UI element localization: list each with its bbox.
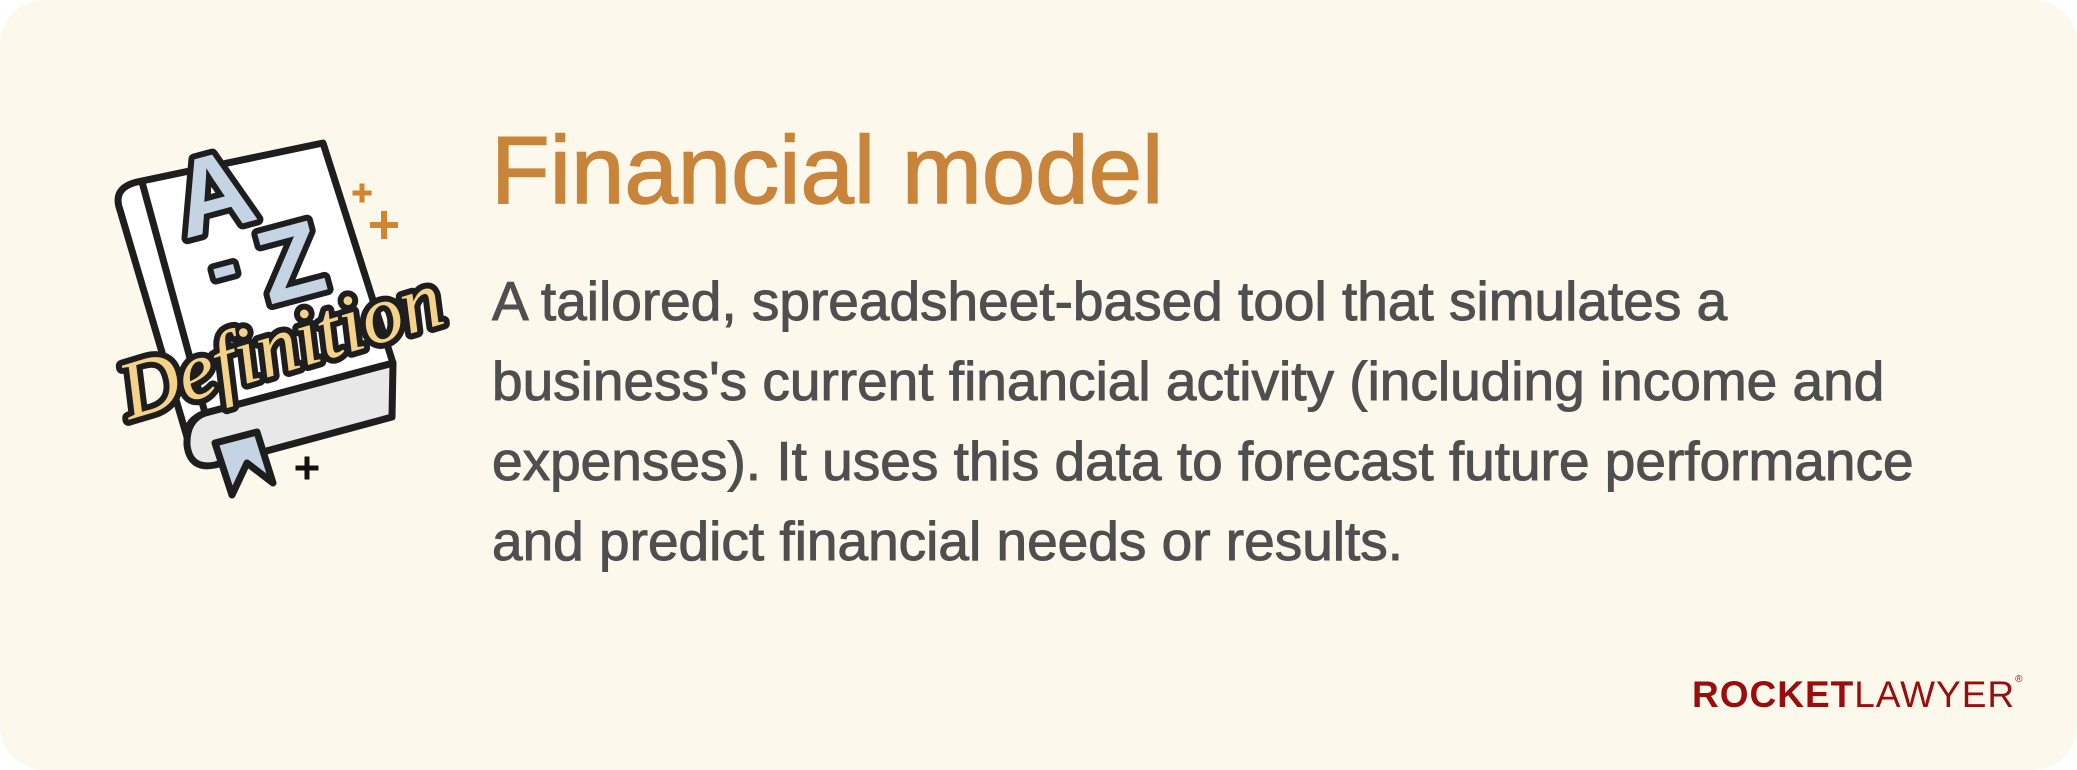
logo: ROCKETLAWYER®: [1692, 674, 2024, 715]
body text: A tailored, spreadsheet-based tool that simulates a: [492, 270, 1727, 332]
letters A-Z: A: [160, 124, 266, 261]
sparkles: [298, 186, 395, 477]
pages block: [187, 363, 393, 466]
icon: definition book: [107, 124, 453, 498]
spine line: [142, 182, 205, 413]
body text: [491, 270, 1914, 572]
letters A-Z: Z: [245, 199, 336, 327]
letters A-Z: [160, 124, 336, 327]
bookmark: [215, 432, 273, 495]
body text: and predict financial needs or results.: [492, 510, 1403, 572]
letters A-Z: -: [198, 218, 247, 311]
cover: [118, 143, 393, 437]
title: Financial model: [491, 117, 1163, 224]
script word Definition: Definition: [107, 253, 453, 437]
body text: business's current financial activity (including income and: [492, 350, 1884, 412]
body text: expenses). It uses this data to forecast future performance: [492, 430, 1914, 492]
